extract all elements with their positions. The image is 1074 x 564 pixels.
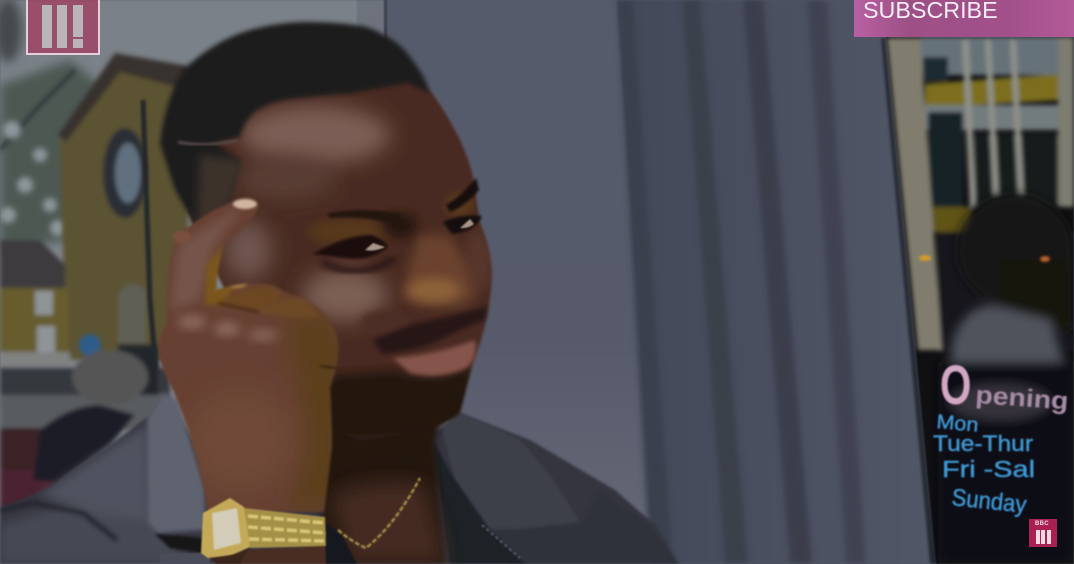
lips bbox=[393, 340, 476, 376]
right cheek bbox=[467, 235, 490, 288]
knuckle highlights bbox=[178, 315, 206, 329]
temple highlight bbox=[224, 220, 272, 280]
background: grey wall and post bbox=[357, 0, 665, 564]
man: neck and chest bbox=[300, 395, 450, 564]
hair bbox=[160, 22, 430, 228]
forehead highlight bbox=[240, 105, 390, 165]
right eyebrow bbox=[446, 178, 479, 212]
chin shadow bbox=[330, 366, 472, 440]
chalk hours: Mon bbox=[936, 411, 979, 437]
jacket collar right bbox=[442, 413, 580, 530]
fingernail bbox=[233, 199, 257, 209]
jacket collar left bbox=[147, 392, 205, 533]
gold necklace bbox=[338, 478, 420, 548]
dark shirt strap bbox=[326, 524, 357, 564]
street and passer-by bbox=[0, 334, 170, 508]
shaved line in hair bbox=[178, 140, 238, 145]
moustache bbox=[373, 306, 487, 354]
knuckle nail edge bbox=[173, 231, 191, 243]
background: street reflection on the left bbox=[0, 0, 390, 564]
chalk heading: O bbox=[940, 355, 971, 417]
left eyebrow bbox=[327, 210, 400, 225]
shop window on the right bbox=[886, 37, 1074, 564]
man: jacket bbox=[0, 390, 678, 564]
under-eye shading bbox=[322, 258, 395, 271]
hair fade bbox=[197, 155, 245, 228]
reflected brick building bbox=[0, 53, 188, 368]
nose bbox=[402, 235, 475, 306]
chalkboard opening hours bbox=[933, 355, 1069, 519]
BBC Three logo, bottom right: BBC bbox=[1035, 521, 1049, 527]
chalk hours: Fri -Sal bbox=[942, 456, 1035, 482]
chalk hours: Sunday bbox=[950, 484, 1028, 519]
reflected person in window bbox=[938, 194, 1074, 564]
gold wristwatch bbox=[201, 498, 326, 564]
brow shading bbox=[312, 220, 384, 242]
reflected lamp post bbox=[143, 100, 158, 395]
right eye bbox=[443, 216, 482, 234]
chalk hours: Tue-Thur bbox=[933, 431, 1033, 456]
left eye bbox=[313, 235, 388, 259]
BBC Three logo, bottom right bbox=[1029, 519, 1057, 547]
moustache side shading bbox=[360, 310, 384, 324]
sleeve fold bbox=[0, 503, 117, 540]
chalk hours bbox=[933, 411, 1035, 519]
sleeve light area bbox=[0, 490, 190, 564]
BBC Three logo, top left bbox=[26, 0, 100, 55]
chalk heading: pening bbox=[975, 381, 1069, 415]
chalk heading bbox=[940, 355, 1069, 417]
finger highlight bbox=[170, 210, 238, 309]
wrist shading bbox=[202, 408, 286, 472]
finger crease bbox=[320, 366, 337, 368]
cheek highlight bbox=[303, 269, 387, 321]
man: raised hand tapping temple bbox=[158, 197, 339, 564]
fist upper fingers bbox=[228, 287, 282, 310]
golden shaded side bbox=[288, 312, 338, 512]
reflected trees bbox=[0, 0, 100, 250]
golden gap behind fingers bbox=[204, 248, 234, 306]
subscribe banner bbox=[854, 0, 1074, 37]
thumb tip bbox=[230, 282, 248, 290]
background: fluted grey column bbox=[617, 0, 938, 564]
man: head bbox=[160, 22, 492, 440]
